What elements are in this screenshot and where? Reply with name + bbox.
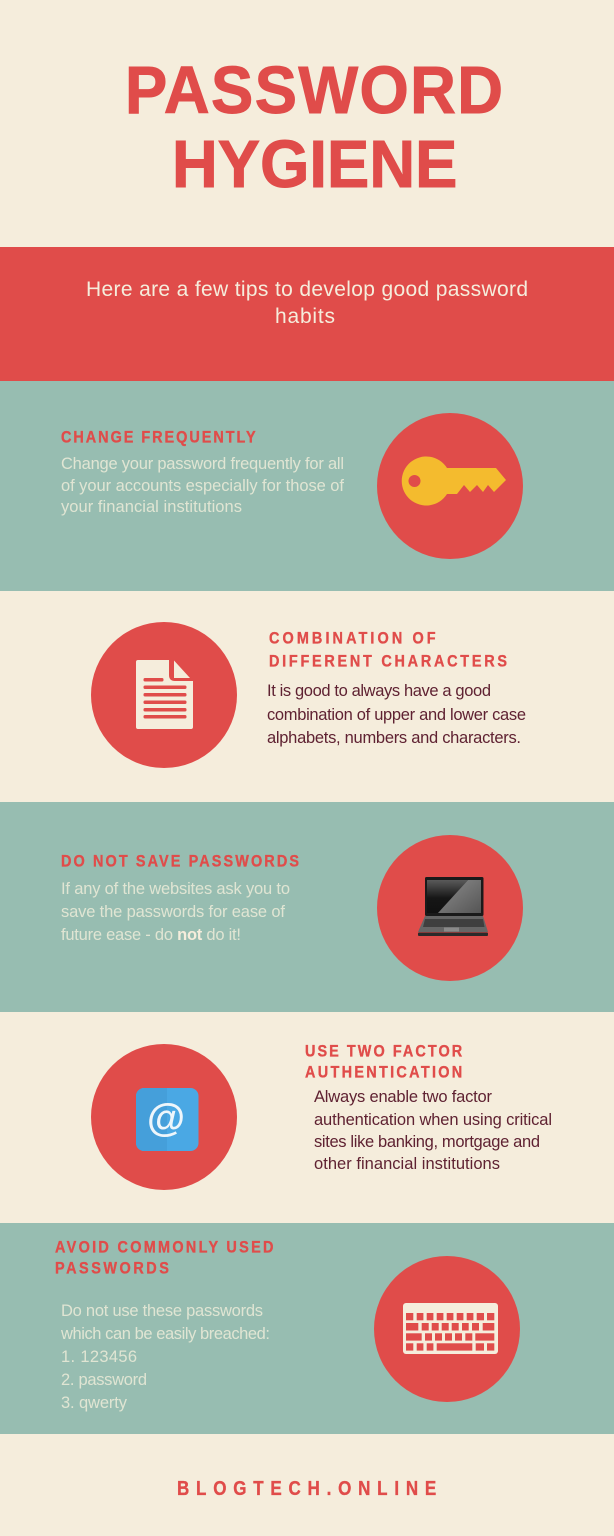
heading: use two factor authentication: [305, 1042, 463, 1082]
text: change frequently: Change your password frequently for all: [61, 455, 344, 473]
text: avoid passwords list: [60, 1302, 270, 1412]
icon: keyboard: [374, 1256, 520, 1402]
icon: laptop: [377, 835, 523, 981]
text: do not save: [61, 880, 290, 944]
text: avoid passwords list: Do not use these passwords: [61, 1302, 263, 1320]
icon: document: [91, 622, 237, 768]
text: combination: It is good to always have a good: [267, 682, 491, 700]
text: avoid passwords list: which can be easily breached:: [60, 1325, 270, 1343]
heading: use two factor authentication: USE TWO FACTOR: [305, 1042, 463, 1061]
panel: change frequently: [0, 381, 614, 591]
heading: combination of different characters: DIFFERENT CHARACTERS: [269, 652, 507, 671]
text: do not save: save the passwords for ease of: [61, 903, 285, 921]
icon: key: [377, 413, 523, 559]
heading: change frequently: CHANGE FREQUENTLY: [61, 428, 256, 447]
heading: avoid commonly used passwords: [55, 1238, 273, 1278]
text: change frequently: your financial institutions: [61, 498, 242, 516]
text: combination: combination of upper and lower case: [267, 706, 526, 724]
icon: at sign: @: [147, 1097, 185, 1140]
text: avoid passwords list: 3. qwerty: [61, 1394, 128, 1412]
text: two factor: [314, 1088, 552, 1173]
panel: avoid common passwords: [0, 1223, 614, 1434]
icon: at sign: [91, 1044, 237, 1190]
text: do not save: If any of the websites ask you to: [61, 880, 290, 898]
text: two factor: Always enable two factor: [314, 1088, 492, 1106]
title: [125, 52, 503, 201]
panel: intro banner: [0, 247, 614, 381]
heading: avoid commonly used passwords: AVOID COMMONLY USED: [55, 1238, 273, 1257]
panel: two factor authentication: [91, 1042, 552, 1190]
text: combination: [267, 682, 526, 747]
heading: combination of different characters: [269, 629, 507, 671]
panel: combination of characters: [91, 622, 526, 768]
panel: intro banner: Here are a few tips to develop good password: [86, 278, 528, 301]
heading: do not save passwords: DO NOT SAVE PASSWORDS: [61, 852, 299, 871]
heading: avoid commonly used passwords: PASSWORDS: [55, 1259, 169, 1278]
footer: site name: BLOGTECH.ONLINE: [177, 1477, 436, 1499]
title: HYGIENE: [172, 126, 457, 201]
text: do not save: future ease - do not do it!: [61, 926, 241, 944]
panel: do not save passwords: [0, 802, 614, 1012]
heading: combination of different characters: COMBINATION OF: [269, 629, 436, 648]
text: combination: alphabets, numbers and characters.: [267, 729, 521, 747]
text: change frequently: [61, 455, 344, 516]
heading: use two factor authentication: AUTHENTICATION: [305, 1063, 462, 1082]
text: two factor: sites like banking, mortgage and: [314, 1133, 540, 1151]
text: change frequently: of your accounts especially for those of: [61, 477, 344, 495]
text: two factor: other financial institutions: [314, 1155, 500, 1173]
title: PASSWORD: [125, 52, 503, 127]
text: avoid passwords list: 2. password: [61, 1371, 147, 1389]
text: avoid passwords list: 1. 123456: [61, 1348, 137, 1366]
text: two factor: authentication when using critical: [314, 1111, 552, 1129]
panel: intro banner: habits: [275, 305, 335, 328]
